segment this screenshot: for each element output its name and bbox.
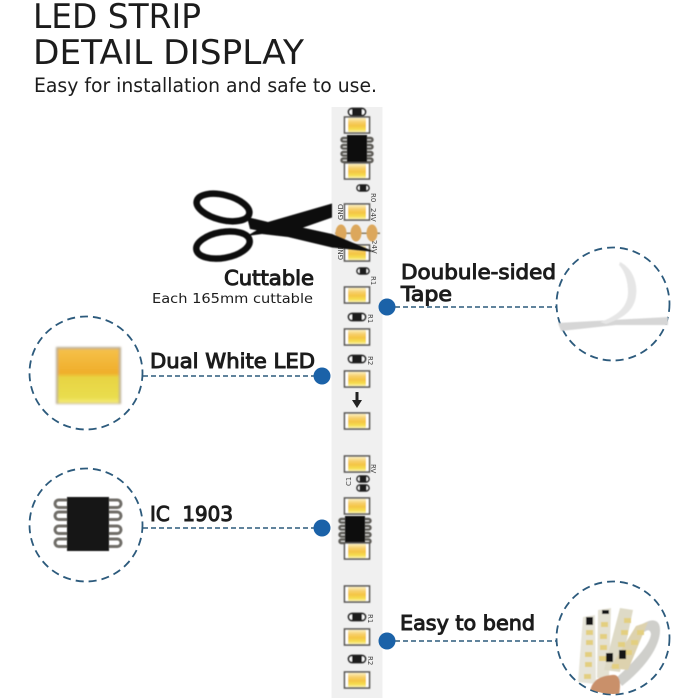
icon: scissors: [194, 189, 375, 262]
icon: IC chip: [55, 497, 121, 551]
connector: bend: [378, 632, 556, 650]
panel: LED strip: [332, 107, 382, 698]
strip small labels: GND: [337, 204, 345, 220]
title: DETAIL DISPLAY: [33, 33, 304, 73]
cut pads: [335, 224, 380, 242]
strip small labels: C1: [345, 477, 353, 486]
connector: tape: [378, 298, 556, 316]
connector: LED: [143, 368, 330, 384]
strip small labels: R2: [366, 656, 374, 665]
direction arrow: [352, 392, 362, 408]
strip small labels: [337, 193, 378, 665]
heading: double-sided tape: Doubule-sided: [401, 260, 556, 284]
panel: bend circle: [556, 582, 670, 700]
strip small labels: RV: [369, 464, 377, 473]
heading: double-sided tape: Tape: [400, 282, 452, 306]
strip small labels: 24V: [369, 208, 377, 222]
strip small labels: R1: [366, 614, 374, 623]
connector: IC: [143, 520, 330, 536]
icon: dual white LED: [56, 347, 121, 404]
strip small labels: R1: [369, 276, 377, 285]
panel: LED circle: [30, 316, 142, 430]
heading: Dual White LED: Dual White LED: [150, 349, 315, 373]
cuttable note: Each 165mm cuttable: [152, 291, 313, 307]
strip small labels: GND: [337, 244, 345, 260]
heading: Cuttable: [152, 266, 314, 307]
strip small labels: R2: [366, 356, 374, 365]
icon: tape curl: [558, 262, 668, 331]
panel: IC circle: [30, 468, 142, 582]
strip small labels: R0: [369, 193, 377, 202]
heading: Easy to bend: Easy to bend: [400, 611, 535, 635]
icon: bent LED strips in hand: [578, 608, 660, 700]
panel: tape circle: [556, 248, 670, 360]
heading: Cuttable: Cuttable: [224, 266, 314, 290]
strip small labels: 24V: [370, 240, 378, 254]
subtitle: Easy for installation and safe to use.: [34, 74, 377, 97]
title: [33, 0, 304, 73]
heading: double-sided tape: [400, 260, 556, 306]
heading: IC 1903: IC 1903: [150, 502, 233, 526]
strip small labels: R1: [366, 314, 374, 323]
